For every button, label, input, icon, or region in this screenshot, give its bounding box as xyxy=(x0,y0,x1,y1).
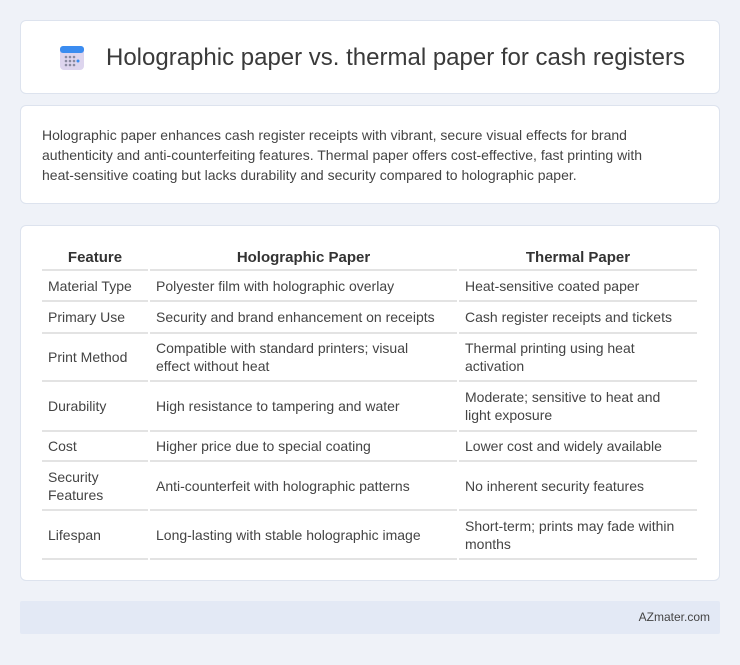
title card xyxy=(20,20,720,94)
footer xyxy=(20,601,720,634)
comparison table card: Cost xyxy=(48,438,77,454)
title: Holographic paper vs. thermal paper for cash registers xyxy=(106,44,685,71)
comparison table card: effect without heat xyxy=(156,358,269,374)
footer: AZmater.com xyxy=(639,610,710,624)
comparison table card: Material Type xyxy=(48,278,132,294)
comparison table card: Primary Use xyxy=(48,309,125,325)
comparison table card: High resistance to tampering and water xyxy=(156,398,400,414)
comparison table card: light exposure xyxy=(465,407,552,423)
comparison table card: Lifespan xyxy=(48,526,101,542)
intro text card xyxy=(20,105,720,204)
comparison table card: Print Method xyxy=(48,349,127,365)
comparison table card: Security xyxy=(48,468,99,484)
comparison table card: Anti-counterfeit with holographic patterns xyxy=(156,478,410,494)
icon: calendar xyxy=(60,46,84,70)
comparison table card: Holographic Paper xyxy=(237,248,370,266)
comparison table card: Features xyxy=(48,486,103,502)
comparison table card: Thermal printing using heat xyxy=(465,340,635,356)
comparison table card: Lower cost and widely available xyxy=(465,438,662,454)
comparison table card: Short-term; prints may fade within xyxy=(465,518,674,534)
comparison table card: Polyester film with holographic overlay xyxy=(156,278,394,294)
comparison table card: Long-lasting with stable holographic image xyxy=(156,526,421,542)
comparison table card: Heat-sensitive coated paper xyxy=(465,278,639,294)
comparison table card: Thermal Paper xyxy=(526,248,630,266)
comparison table card: Moderate; sensitive to heat and xyxy=(465,389,660,405)
comparison table card: Compatible with standard printers; visual xyxy=(156,340,408,356)
comparison table card: activation xyxy=(465,358,524,374)
comparison table card xyxy=(20,225,720,581)
comparison table card: Security and brand enhancement on receipts xyxy=(156,309,435,325)
comparison table card: Feature xyxy=(68,248,122,266)
comparison table card: Cash register receipts and tickets xyxy=(465,309,672,325)
comparison table card: Higher price due to special coating xyxy=(156,438,371,454)
comparison table card: Durability xyxy=(48,398,106,414)
intro text card: Holographic paper enhances cash register receipts with vibrant, secure visual effects for brand authenticity and anti-counterfeiting features. Thermal paper offers cost-effective, fast printing with heat-sensitive coating but lacks durability and security compared to holographic paper. xyxy=(42,127,642,183)
comparison table card: months xyxy=(465,536,511,552)
comparison table card: No inherent security features xyxy=(465,478,644,494)
